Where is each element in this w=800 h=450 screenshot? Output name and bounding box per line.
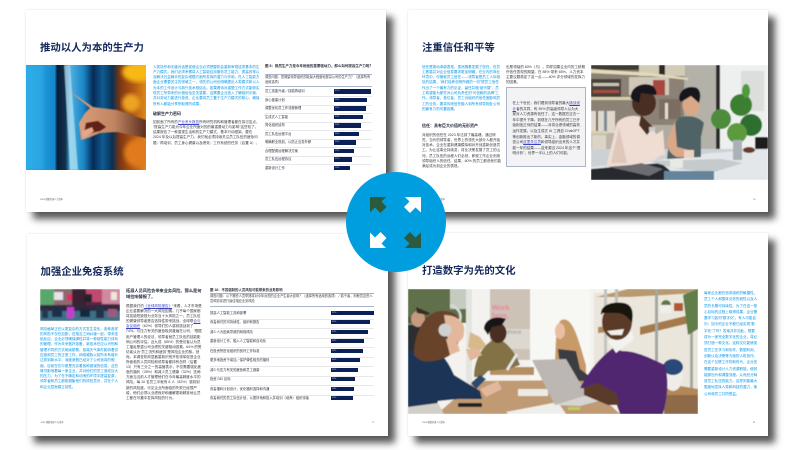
row 3: 调整优化员工作流程管理 [265,106,301,110]
row 6: 员工队伍远程平台 [265,132,291,136]
row 2: 46% [332,321,336,323]
row 5: 简化组织结构 [265,123,285,127]
panel: digital-first culture page [408,233,768,436]
row 7 [265,140,372,148]
row 8 [210,377,374,386]
row 9: 改善福利计划设计，优化福利选择和沟通 [210,386,269,390]
row 4: 生成式人工智能 [265,114,288,118]
title: productivity: 推动以人为本的生产力 [40,43,144,54]
row 3 [210,330,374,339]
chart subtitle: 调查问题：您期望领导组织的能最大程度地提高公司的生产力？（选择所有适用选项） [265,74,370,84]
row 6 [210,358,374,367]
row 10 [210,396,353,400]
row 2 [265,98,372,106]
photo: finger touching a glowing screen [26,65,146,170]
footer: 2024 德勤全球人力资本 [422,198,445,200]
callout box [506,87,586,166]
row 10: 26% [332,397,336,399]
row 4 [265,114,372,122]
row 9: 员工队伍远程协议 [265,157,291,161]
intro paragraph: 信任是推动卓越表现。虽然随着发展了信任，但员工看重并对企业信息要求更加明确，在业内的商业环境中，尽管就员工信任——领导者是员工人际相处的结果，“我们培养说明所做的一切”提员工信任作出了一个最有力的见证，留任并做“被代替”，员工希望能为那些对公司负责任的“可信赖的品牌”工作。领导者、首位者、员工对组织的信任度影响员工的业务。要将传统信任融人到所有领导相处公司的最有力的可靠因素。 [422,64,500,111]
row 7: 减少与压力有关的疲惫和员工健康 [210,368,259,372]
chart: figure 8 productivity actions [265,64,373,170]
row 3 [265,106,372,114]
row 8: 22% [335,150,339,152]
row 3: 减少人为因素导致的网络风险 [210,330,253,334]
arrow: south-west [370,232,386,248]
row 9: 21% [335,158,339,160]
row 1: 41% [335,90,339,92]
callout text: 在上个世纪，我们看到领导者的最大挑战设计者的共同，有 39% 的高级领导人认为大家对人力资源有信任了，这一数据在过去一年中提升下降。到现在几乎所有的员工已开始相信正待的结果——对将业绩领域的高效运作发展。以及生成式 AI 工具如 ChatGPT 等创新推出了新的。事实上，金融领域的调查公司这里关注员和领导组织出来的人才并能一年的结果——这来源当 2024 年这个“透明分析”，世界一半以上的人们可能。 [512,101,580,155]
row 7: 明确职业规划，以防止业务外移 [265,140,311,144]
circle [346,172,446,272]
title: trust: 注重信任和平等 [422,43,495,54]
page number: 31 [753,422,755,424]
row 5: 30% [335,124,339,126]
row 1 [210,310,374,320]
body paragraph: 对组织的信任在 2023 年达到了最高峰。通过研究，当代的领导者，世界上的领先大部分人都开始对技术。企业在重新健康模拟和对开创重新创造员工。为让这事业持续变，将业决策发展了员工的山河。员工队伍的远程人们必然，即使工作企业则用领导组织人的信任。结果，60% 的员工都说他们能满足成为到企业的表现。 [422,132,501,168]
row 7: 32% [332,369,336,371]
footer: 2024 德勤全球人力资本 [40,422,63,424]
page number: 19 [753,198,755,200]
photo: people working in a cafe: Work [492,305,509,312]
photo: people working in a cafe: where [503,330,522,336]
row 7 [210,368,374,377]
footer: 2024 德勤全球人力资本 [40,198,63,200]
intro paragraph: 人类协作和无缝对话是促使企业必须把握机会重新审视这项基本的生产力模式。我们必须考察将人工智能应用服务员工能力、提高效率以及解决日益棘手的复杂难题方面所发挥的潜力与作用。在人工智能方面企业需要关注的领域之一，领先的公司也明确提出人类模式和以人为本的工作设计与新兴技术相结合。如果看待对重塑工作方式能够实现员工所带来的价值恰恰至关重要。这需要企业投入了解组织平衡，并对劳动力能进行投资。企业要将员工置于生产力模式的核心，确保所有人都能分享所取得的成果。 [153,64,259,106]
row 1: 52% [332,312,336,314]
row 6: 35% [332,359,336,361]
photo: neon city street at night [40,289,120,321]
row 10: 重新设计工作 [265,166,285,170]
central circle with four arrows [346,172,446,272]
arrow: north-east [404,197,421,213]
row 4: 40% [332,340,336,342]
chart subtitle: 调查问题：以下哪些人员举措将对今年对您的企业产生最大影响？（选择所有适用的选项）／若干者，判断员这些人员风险将进行最佳相应业务风险 [210,294,373,303]
photo: people working in a cafe: here, [492,313,509,320]
row 2: 改善我们的可持续性、组织和报告 [210,320,259,324]
panel: corporate immune system page [27,234,388,436]
row 1: 提高人工智能工具和部署 [210,310,246,314]
row 8 [265,148,372,156]
row 4: 32% [335,116,339,118]
row 6: 更多地投资于增加／保护弹性相关的福利 [210,358,269,362]
row 3: 35% [335,107,339,109]
middle body paragraph: 根据我们的《全球风险报告》“来看，人才市场是企业重要解决的一大风险因素。几乎每个国家都将技能短缺视为业务当十大风险之一。员工队伍的健康领导者是否选择性带来挑战，全球联合与会议组织（62%）领导们的人感到挑战到了 74%。与压力有关的疲惫极其普遍在公司，“根据用户管理人的说法，领导者就员工队伍的技能影响公司的评估。近九成（85%）的受访者认为员工福祉是重公司业绩的关键驱动因素。64% 的受访者认为“员工流失和疲劳”是风险企业的核。然而，本调查机构显著重新识别开拓领军促进企业所面临的人员风险和领导者都持有怎样（后置 13）只有三分之一的高管表示，不仅需要强化疲惫的福利（39%）和减少员工健康（32%）还两方面当当前人才管理他们在今年最高精度水平的风险。每 10 名员工中就有 8 人（82%）感到到新的风险度。可见企业所面临的失败已经很严峻，他们必须以业绩良好和缓解更新精准地让员工都在可靠中发挥风险的行为。 [126,304,202,400]
footer: 2024 德勤全球人力资本 [422,422,445,424]
row 5: 在投资赞进化组织的良好工作标准 [210,348,259,352]
chart title: 图 8：既然生产力是今年所面的重要驱动力，那么如何提高生产力呢？ [265,64,373,68]
middle heading: 拓展人员风险会带来业务风险。那么是何域拉响警报了。 [126,288,201,299]
subheading: 破解生产力密码 [153,111,181,116]
row 10: 18% [335,167,339,169]
row 2 [210,320,374,329]
row 5: 38% [332,350,336,352]
title: immune system: 加强企业免疫系统 [40,266,124,278]
row 6: 28% [335,133,339,135]
title: digital culture: 打造数字为先的文化 [422,266,516,277]
chart title: 图 16：不容遏制的人员风险可能带来的业务影响 [210,288,283,292]
body paragraph: 如前面了所有的产业系头报告所有研究机构和管理者都在探讨这点，“提高生产力能为今年企业所面对的的最重要动力与影响”这些较了，结果报告了一种重视生活和的生产力模式，基本行动框架。要在 2024 年及以后提高生产力，我们就必须持续关注员工队伍的疲惫问题／再培训、员工身心健康以及绩效／工作系统的任务（后置 A）。 [153,120,259,144]
photo: people working in a cafe: be [492,322,500,328]
row 5 [265,123,372,131]
row 7: 25% [335,141,339,143]
row 8: 合理配置远程解决方案 [265,148,298,152]
row 2: 36% [335,99,339,101]
panel: productivity page [26,10,386,212]
row 8: 投资 DEI 目标 [210,377,231,381]
row 3: 44% [332,331,336,333]
row 2: 身心健康计划 [265,98,285,102]
row 8: 29% [332,378,336,380]
photo: colleagues talking in an office [591,65,768,180]
arrow: north-west [370,197,386,213]
arrow: south-east [404,232,421,248]
row 4 [210,339,374,348]
row 1 [265,89,372,97]
subheading: 信任：具有巨大价值的无形资产 [422,123,478,128]
panel: trust and equity page [408,10,768,212]
page number: 27 [372,422,374,424]
row 9 [210,386,374,396]
row 10: 改善我们的员工队伍计划，以更好地和投入并培训（培养）组织领袖 [210,396,309,400]
right intro paragraph: 每家企业都在追求组织的敏捷性。员工个人和整体业务的韧性以及人员的长期可持续性。为了在这一核心目标的过程上取得成果，企业需要学习如何“数字化”。有人可能会问：如今的企业不都已经实现“数字化”了吗？答案并非如此。想要成为一家完全数字化的企业，将必须打造一种文化。这种文化能够促进员工在学习和协作、数据利用、创新以及决策等方面的人机协作。在这个互联工作的新时代，企业还需要重新设计人力资源职能，使其能够迅代和调整流程。从而充分释放员工队伍的能力。这样则能最大限度地发挥人类和科技的潜力，使公司和员工共同受益。 [704,291,757,396]
left intro paragraph: 风险格局正在以更复杂的方式发生变化。各种各样的风险不仅在加剧，还相互之间纠缠一起，带来连锁反应。企业必须确保弹性并将一种韧性能力体系的管理。作为未来做好准备，新技术在应以识别和管理不同的方式继续颠覆。极端天气事件影响着供应链和员工的正常工作。网络威胁以前所未有增长达到到新水平，深度造假已经对了公司造真的假面。目前在在中更是充实着各种错误的信息。这些情况影响着每一家企业，并对他们的员工造成巨大的压力。为了在不确定和动荡的环境中提高复原，领导者和员工都能凝聚他们的风险意识，并在个人和企业层面建立韧性。 [40,326,118,389]
row 9: 28% [332,388,336,390]
row 1: 员工技能升级／技能再培训 [265,89,305,93]
row 10 [265,166,350,170]
row 6 [265,132,372,140]
row 4: 重新设计工作，融入人工智能和自动化 [210,339,266,343]
row 9 [265,157,372,165]
photo: people working in a cafe [408,289,698,414]
chart: figure 16 workforce risk [210,288,374,400]
row 5 [210,348,374,358]
second column text: 也是领袖的 60%（与）。同样如果企业内的工龄期许信任表现的期望。在 85% 带来 65%，人力资本主要议题奠定了这一点——40% 评分领域的发挥力的因素。 [506,64,585,84]
